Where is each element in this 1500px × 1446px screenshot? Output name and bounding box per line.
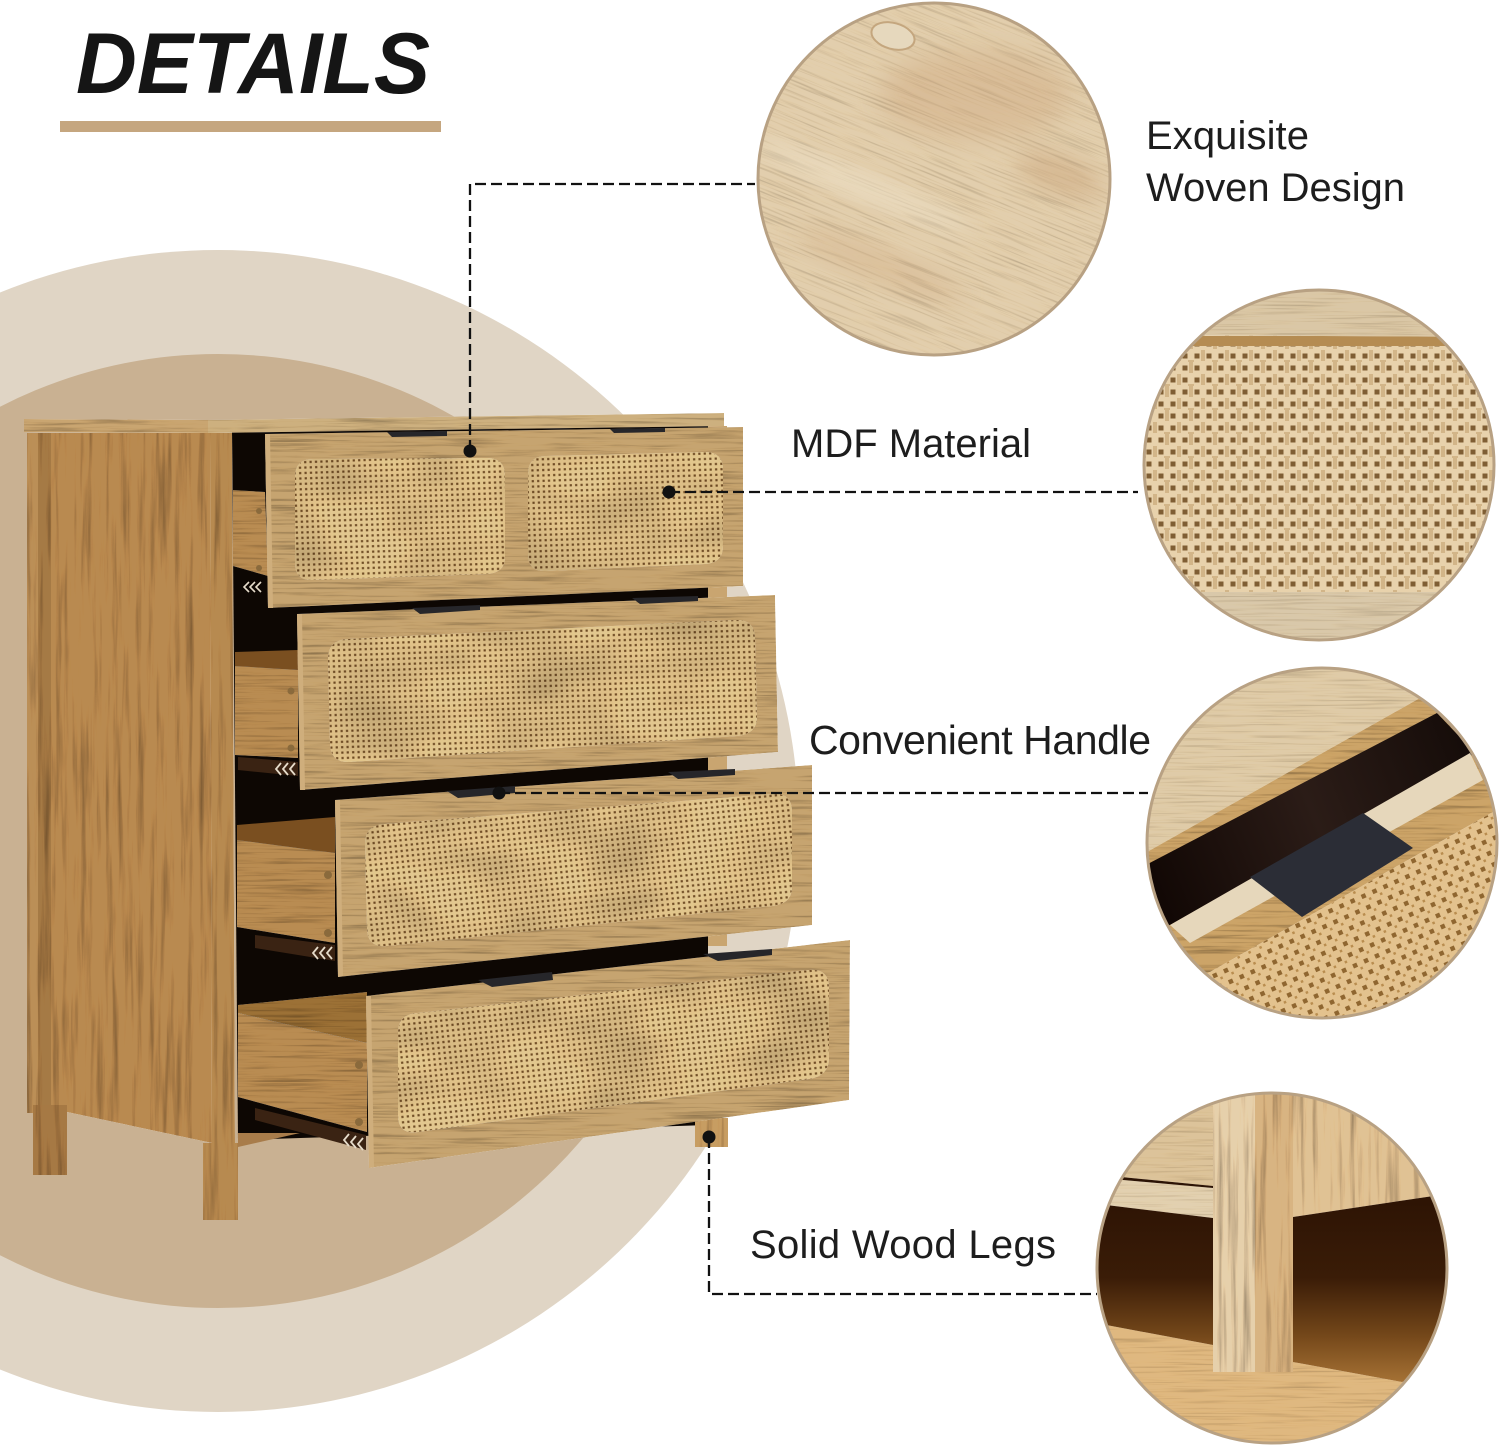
- right front post: [708, 426, 727, 946]
- callout: handle leader: [492, 786, 1148, 800]
- drawer 4 handles: [478, 949, 772, 987]
- callout: woven design leader: [464, 184, 755, 458]
- drawer 1: [233, 427, 743, 608]
- drawer 2 inner bottom: [235, 650, 298, 670]
- background circle: outer: [0, 250, 799, 1412]
- drawer 1 handles: [387, 428, 665, 437]
- rear leg: [695, 1118, 728, 1147]
- drawer 3 slide: [255, 935, 335, 961]
- drawer 2 front: [297, 595, 778, 790]
- left leg: [33, 1105, 67, 1175]
- drawer 2 side: [235, 666, 298, 758]
- detail circle: wood grain: [756, 2, 1112, 356]
- drawer 3 inner bottom: [237, 817, 335, 853]
- drawer 2 slide: [238, 757, 298, 776]
- drawer 3 handles: [447, 769, 735, 798]
- drawer 4 inner bottom: [238, 992, 367, 1043]
- detail circle: solid wood leg: [1090, 1085, 1460, 1446]
- drawer 1 slide: [244, 582, 261, 592]
- side panel: [50, 433, 212, 1143]
- background circle: inner: [0, 354, 695, 1308]
- side panel left stile: [27, 433, 51, 1113]
- drawer 4 side: [238, 1013, 367, 1132]
- drawer 1 rattan right: [528, 452, 723, 571]
- title: DETAILS: [76, 16, 430, 112]
- lower shelf rail: [238, 1133, 300, 1147]
- dresser illustration: [24, 413, 850, 1220]
- label: exquisite woven design: [1146, 114, 1405, 210]
- label: exquisite woven design: Exquisite: [1146, 114, 1309, 158]
- drawer 4 rattan: [398, 970, 829, 1132]
- label: exquisite woven design: Woven Design: [1146, 166, 1405, 210]
- drawer 1 rattan left: [295, 458, 505, 580]
- label: MDF material: MDF Material: [791, 422, 1031, 466]
- drawer 3 side: [237, 840, 335, 943]
- drawer 3 rattan: [365, 794, 792, 946]
- drawer 3: [237, 765, 812, 977]
- drawer 3 front: [335, 765, 812, 977]
- top board: [24, 413, 724, 433]
- drawer 1 side: [233, 490, 268, 576]
- detail circle: handle close-up: [1140, 660, 1500, 1025]
- title underline: [60, 121, 441, 132]
- drawer 2: [235, 595, 778, 790]
- cabinet interior: [232, 425, 708, 1140]
- label: solid wood legs: Solid Wood Legs: [750, 1223, 1056, 1267]
- drawer 1 front: [265, 427, 743, 608]
- drawer 4 front: [366, 940, 850, 1168]
- drawer 4 slide: [255, 1108, 366, 1150]
- drawer 2 handles: [412, 596, 698, 614]
- drawer 2 rattan: [328, 620, 757, 762]
- drawer 4: [238, 940, 850, 1168]
- front post and leg: [203, 433, 238, 1220]
- label: convenient handle: Convenient Handle: [809, 717, 1151, 763]
- callout: legs leader: [702, 1130, 1097, 1294]
- callout: MDF material leader: [662, 486, 1138, 498]
- detail circle: rattan weave: [1140, 285, 1500, 652]
